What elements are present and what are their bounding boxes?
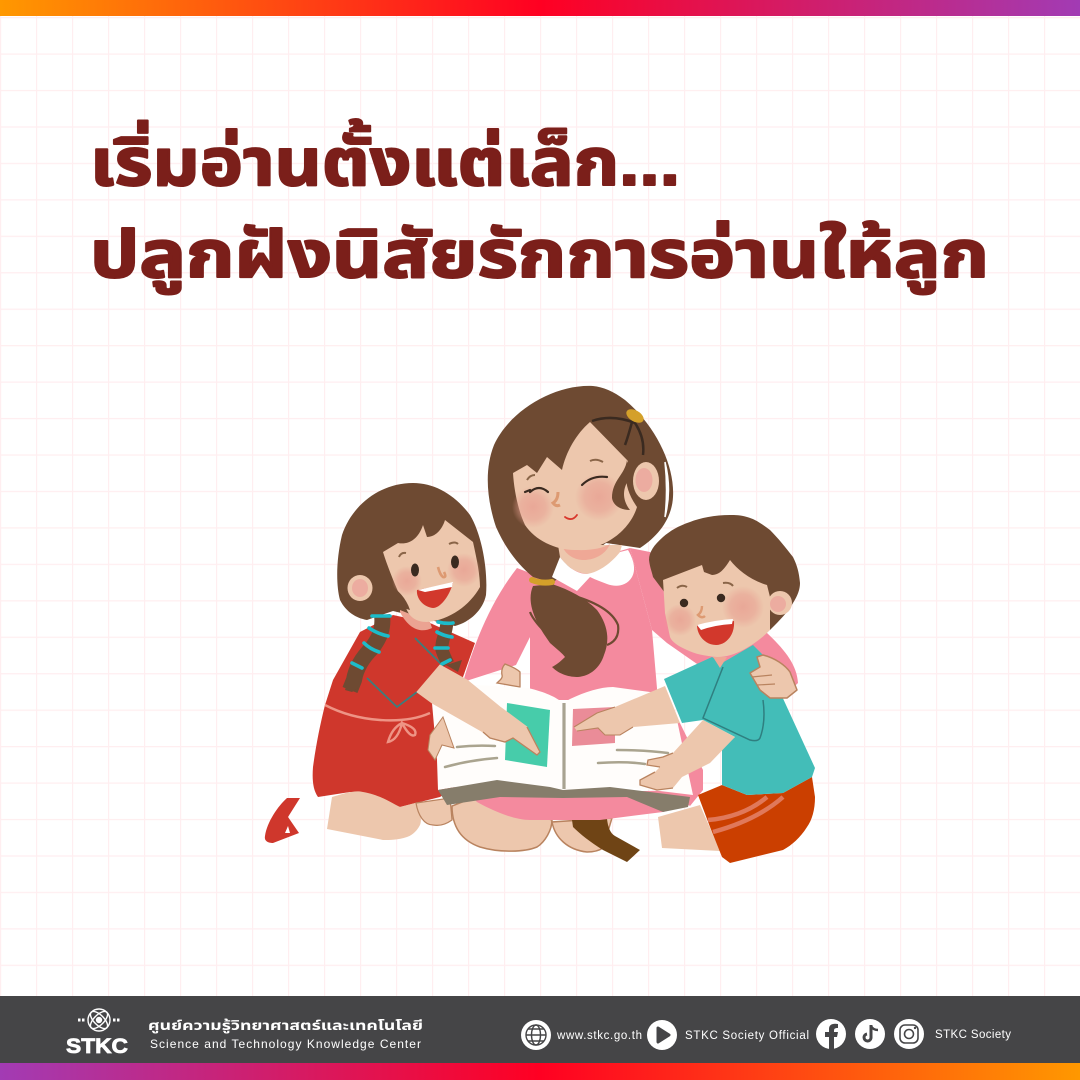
mother's hand on boy — [750, 655, 797, 698]
title: ปลูกฝังนิสัยรักการอ่านให้ลูก — [90, 217, 989, 294]
boy shorts — [698, 777, 815, 863]
mother body — [530, 548, 658, 700]
website: www.stkc.go.th — [556, 1030, 642, 1042]
boy eyes and mouth — [680, 599, 688, 607]
STKC logo — [66, 1009, 128, 1058]
mother hair clip — [592, 418, 643, 455]
boy — [574, 515, 815, 863]
icon: tiktok — [855, 1019, 885, 1049]
mother — [463, 386, 798, 806]
girl braids — [350, 615, 382, 690]
boy ear — [768, 591, 792, 615]
centre name: ศูนย์ความรู้วิทยาศาสตร์และเทคโนโลยี — [148, 1018, 423, 1034]
mother ponytail — [531, 584, 607, 677]
book corner — [428, 717, 454, 760]
book cover — [438, 780, 690, 812]
girl dress sash — [325, 705, 430, 742]
mother face — [513, 422, 637, 550]
footer band — [0, 996, 1080, 1063]
mother ear — [633, 462, 659, 500]
mother left arm — [463, 568, 548, 682]
mother hand — [497, 664, 520, 687]
icon: instagram — [894, 1019, 924, 1049]
top gradient bar — [0, 0, 1080, 16]
mother right arm — [630, 548, 798, 700]
YouTube name: STKC Society Official — [685, 1030, 809, 1042]
centre name — [148, 1018, 423, 1051]
girl eyes and mouth — [411, 564, 419, 576]
girl dress — [313, 615, 480, 807]
girl legs — [327, 791, 421, 840]
girl sleeve lines — [367, 638, 442, 707]
girl — [265, 483, 486, 843]
mother face details — [525, 477, 607, 492]
mother scrunchie — [532, 580, 552, 583]
title: เริ่มอ่านตั้งแต่เล็ก... — [90, 118, 680, 199]
mother's shoe — [572, 819, 640, 862]
mother hair back — [488, 386, 673, 583]
centre name: Science and Technology Knowledge Center — [150, 1037, 421, 1051]
open book — [428, 685, 693, 812]
girl ear — [348, 575, 372, 601]
girl hair lock — [390, 585, 410, 610]
girl neck — [400, 610, 432, 630]
illustration: mother and two children reading — [265, 386, 815, 863]
mother collar — [552, 550, 634, 591]
bottom gradient bar — [0, 1063, 1080, 1080]
mother's lap skirt — [470, 790, 690, 820]
boy face — [663, 560, 770, 657]
book pictures — [505, 703, 550, 767]
boy lower arm — [640, 720, 735, 790]
book pages — [432, 685, 693, 795]
Instagram name: STKC Society — [935, 1029, 1011, 1041]
icon: play — [647, 1020, 677, 1050]
girl face — [383, 520, 480, 622]
girl foot — [265, 798, 300, 843]
boy sleeve lines — [703, 667, 764, 741]
boy leg — [658, 805, 720, 851]
icon: facebook — [816, 1019, 846, 1049]
social links — [521, 1019, 1011, 1050]
title — [90, 118, 989, 294]
mother hair side highlight — [665, 462, 668, 517]
icon: globe — [521, 1020, 551, 1050]
mother right side skirt — [660, 715, 703, 806]
mother neck — [558, 545, 622, 574]
logo wordmark: STKC — [66, 1035, 128, 1058]
boy shorts stripes — [708, 797, 783, 832]
girl hair — [337, 483, 486, 626]
boy hair — [649, 515, 800, 630]
book spine — [562, 703, 566, 789]
logo atom icon — [78, 1009, 120, 1031]
boy pointing arm — [574, 686, 680, 735]
girl's pointing arm — [417, 665, 540, 755]
boy shirt — [664, 645, 815, 795]
mother knees — [452, 795, 612, 852]
book text lines — [445, 746, 668, 767]
mother hair curl — [612, 460, 630, 510]
